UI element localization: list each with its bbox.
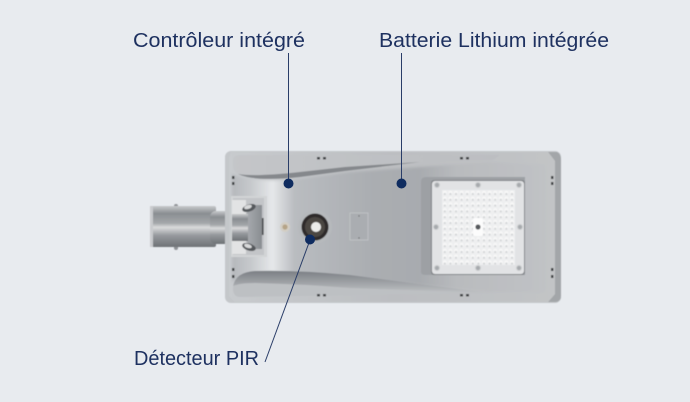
callout: Détecteur PIR bbox=[134, 234, 315, 370]
marker dot bbox=[305, 234, 315, 244]
PIR sensor bbox=[298, 210, 332, 244]
label: Batterie Lithium intégrée bbox=[379, 30, 609, 52]
status LED bbox=[280, 222, 290, 232]
leader line bbox=[265, 240, 310, 362]
screw holes bbox=[232, 157, 553, 296]
pole mount tube bbox=[150, 204, 236, 250]
marker dot bbox=[284, 178, 294, 188]
LED module bbox=[421, 177, 525, 275]
access plate bbox=[350, 213, 368, 240]
callout: Batterie Lithium intégrée bbox=[379, 30, 609, 188]
callout: Contrôleur intégré bbox=[133, 30, 305, 188]
label: Contrôleur intégré bbox=[133, 30, 305, 52]
upper bevel bbox=[233, 155, 500, 176]
leader line bbox=[288, 53, 290, 183]
lamp body bbox=[225, 151, 561, 303]
label: Détecteur PIR bbox=[134, 348, 259, 370]
marker dot bbox=[396, 178, 406, 188]
leader line bbox=[400, 53, 402, 183]
bracket bbox=[231, 196, 267, 257]
lamp photo bbox=[150, 151, 561, 303]
central panel bbox=[232, 162, 545, 292]
lower bevel bbox=[233, 271, 490, 297]
